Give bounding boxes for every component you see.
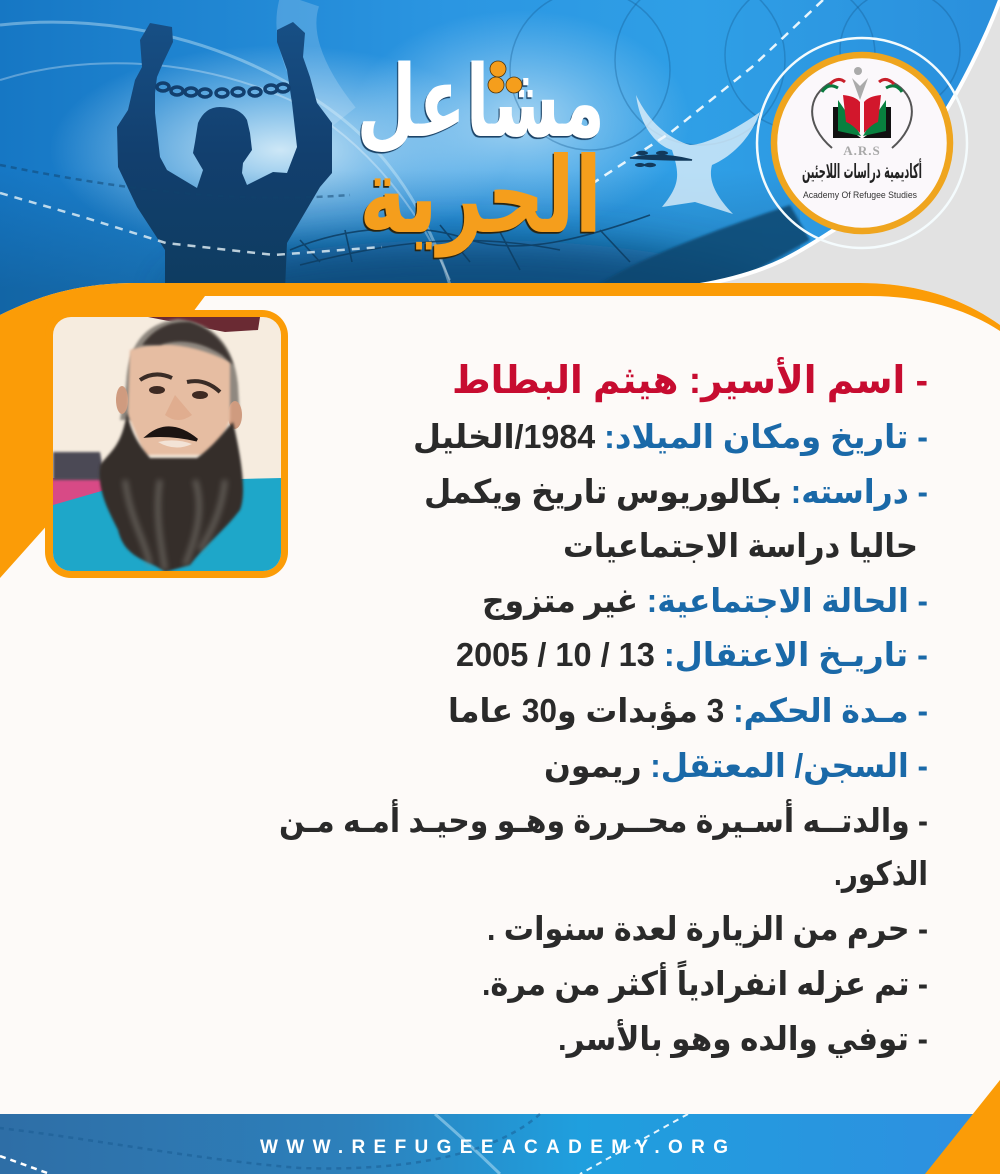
orange frame band xyxy=(0,283,1000,578)
dashed path right xyxy=(587,0,823,187)
study line 2: حاليا دراسة الاجتماعيات xyxy=(563,527,918,565)
title dots xyxy=(488,61,522,93)
header gray corner xyxy=(600,0,1000,340)
study line 1: - دراسته: بكالوريوس تاريخ ويكمل xyxy=(424,473,928,512)
photo frame xyxy=(45,310,288,578)
logo emblem: arcs xyxy=(812,79,912,148)
logo english name: Academy Of Refugee Studies xyxy=(803,190,917,200)
isolation: - تم عزله انفرادياً أكثر من مرة. xyxy=(482,960,928,1004)
icon: chained prisoner silhouette xyxy=(117,22,332,290)
barbed wire xyxy=(290,215,650,270)
prison: - السجن/ المعتقل: ريمون xyxy=(544,747,928,786)
content panel xyxy=(0,283,1000,1174)
birth: - تاريخ ومكان الميلاد: 1984/الخليل xyxy=(413,418,928,457)
logo emblem: book xyxy=(833,67,891,138)
footer orange corner xyxy=(925,1080,1000,1174)
mother line 1: - والدتــه أسـيرة محــررة وهـو وحيـد أمـه مـن xyxy=(279,799,928,841)
arrest date: - تاريـخ الاعتقال: 13 / 10 / 2005 xyxy=(456,636,928,675)
title word: white: مشاعل xyxy=(357,46,605,160)
photo: prisoner portrait xyxy=(53,317,281,572)
footer band xyxy=(0,1080,1000,1174)
marital status: - الحالة الاجتماعية: غير متزوج xyxy=(482,582,928,621)
title word: orange: الحرية xyxy=(359,134,602,258)
website: WWW.REFUGEEACADEMY.ORG xyxy=(260,1137,728,1158)
logo initials: A.R.S xyxy=(843,143,881,158)
father death: - توفي والده وهو بالأسر. xyxy=(558,1018,928,1059)
icon: dove xyxy=(636,95,760,214)
header banner xyxy=(0,0,998,315)
logo xyxy=(757,38,967,248)
visits: - حرم من الزيارة لعدة سنوات . xyxy=(487,910,928,949)
biography text xyxy=(279,356,928,1059)
sentence: - مـدة الحكم: 3 مؤبدات و30 عاما xyxy=(448,692,928,731)
mother line 2: الذكور. xyxy=(834,855,928,894)
fence xyxy=(602,204,811,283)
title xyxy=(357,46,605,258)
prisoner name: - اسم الأسير: هيثم البطاط xyxy=(452,356,928,403)
